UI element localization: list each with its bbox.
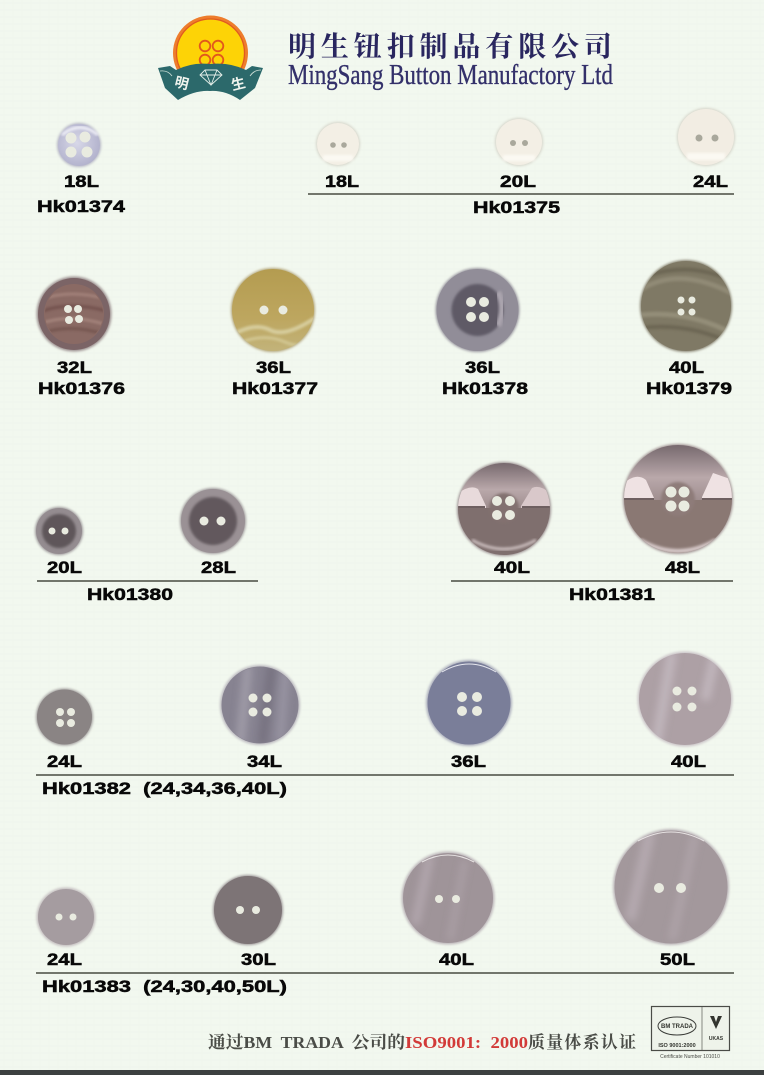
product Hk01376 [36, 276, 125, 398]
product Hk01383: 50L [660, 951, 695, 969]
button [436, 268, 520, 352]
button [231, 268, 315, 352]
product Hk01380: 28L [201, 559, 236, 577]
certification badge: Certificate Number 101010 [660, 1054, 720, 1060]
product Hk01382: 34L [247, 753, 282, 771]
product Hk01376: 32L [57, 359, 92, 377]
button 40L [402, 852, 494, 944]
product Hk01381: 48L [665, 559, 700, 577]
button 40L [638, 652, 732, 746]
button [57, 123, 101, 167]
certification statement: ISO9001: 2000 [405, 1033, 528, 1052]
product Hk01379: Hk01379 [646, 380, 732, 398]
product Hk01374: Hk01374 [37, 198, 126, 216]
product Hk01382 [36, 652, 734, 798]
certification statement: 通过BM TRADA 公司的 [208, 1033, 405, 1052]
product Hk01375 [308, 108, 735, 217]
product Hk01383: Hk01383 (24,30,40,50L) [42, 978, 287, 996]
product Hk01375: 20L [500, 173, 536, 191]
product Hk01382: 36L [451, 753, 486, 771]
product Hk01379 [640, 260, 735, 398]
product Hk01377: Hk01377 [232, 380, 318, 398]
logo: 明 [173, 72, 191, 94]
certification badge: BM TRADA [661, 1024, 694, 1030]
button 24L [36, 888, 96, 946]
product Hk01383: 24L [47, 951, 82, 969]
button 30L [213, 875, 283, 945]
certification badge: UKAS [709, 1036, 724, 1042]
certification badge [652, 1006, 730, 1060]
certification badge: ISO 9001:2000 [658, 1043, 696, 1049]
product Hk01379: 40L [669, 359, 704, 377]
button 24L [677, 108, 735, 166]
certification statement: 质量体系认证 [528, 1032, 636, 1052]
product Hk01375: 24L [693, 173, 728, 191]
product Hk01382: 40L [671, 753, 706, 771]
product Hk01377: 36L [256, 359, 291, 377]
product Hk01381: 40L [494, 559, 530, 577]
button 24L [36, 688, 93, 746]
logo [158, 16, 263, 100]
product Hk01377 [231, 268, 318, 398]
button 48L [623, 444, 733, 556]
button 36L [426, 660, 512, 746]
product Hk01375: 18L [325, 173, 359, 191]
logo: 生 [229, 72, 247, 95]
button 34L [220, 665, 300, 745]
button 50L [613, 829, 729, 945]
product Hk01378: Hk01378 [442, 380, 528, 398]
product Hk01383: 40L [439, 951, 474, 969]
product Hk01380: 20L [47, 559, 82, 577]
button 20L [495, 118, 543, 166]
button 18L [316, 122, 360, 166]
product Hk01383 [36, 829, 734, 996]
title english: MingSang Button Manufactory Ltd [288, 60, 613, 91]
product Hk01374: 18L [64, 173, 99, 191]
product Hk01381: Hk01381 [569, 586, 655, 604]
button [36, 276, 112, 352]
product Hk01380: Hk01380 [87, 586, 173, 604]
product Hk01376: Hk01376 [38, 380, 125, 398]
button 28L [180, 488, 246, 554]
button 40L [457, 462, 551, 556]
product Hk01375: Hk01375 [473, 199, 560, 217]
product Hk01382: 24L [47, 753, 82, 771]
product Hk01383: 30L [241, 951, 276, 969]
product Hk01380 [35, 488, 258, 604]
product Hk01378 [436, 268, 528, 398]
product Hk01382: Hk01382 (24,34,36,40L) [42, 780, 287, 798]
product Hk01374 [37, 123, 126, 216]
title chinese: 明生钮扣制品有限公司 [288, 25, 612, 65]
button [640, 260, 735, 352]
button 20L [35, 507, 83, 555]
certification statement [208, 1032, 636, 1052]
product Hk01378: 36L [465, 359, 500, 377]
product Hk01381 [451, 444, 733, 604]
bottom bar [0, 1070, 764, 1075]
